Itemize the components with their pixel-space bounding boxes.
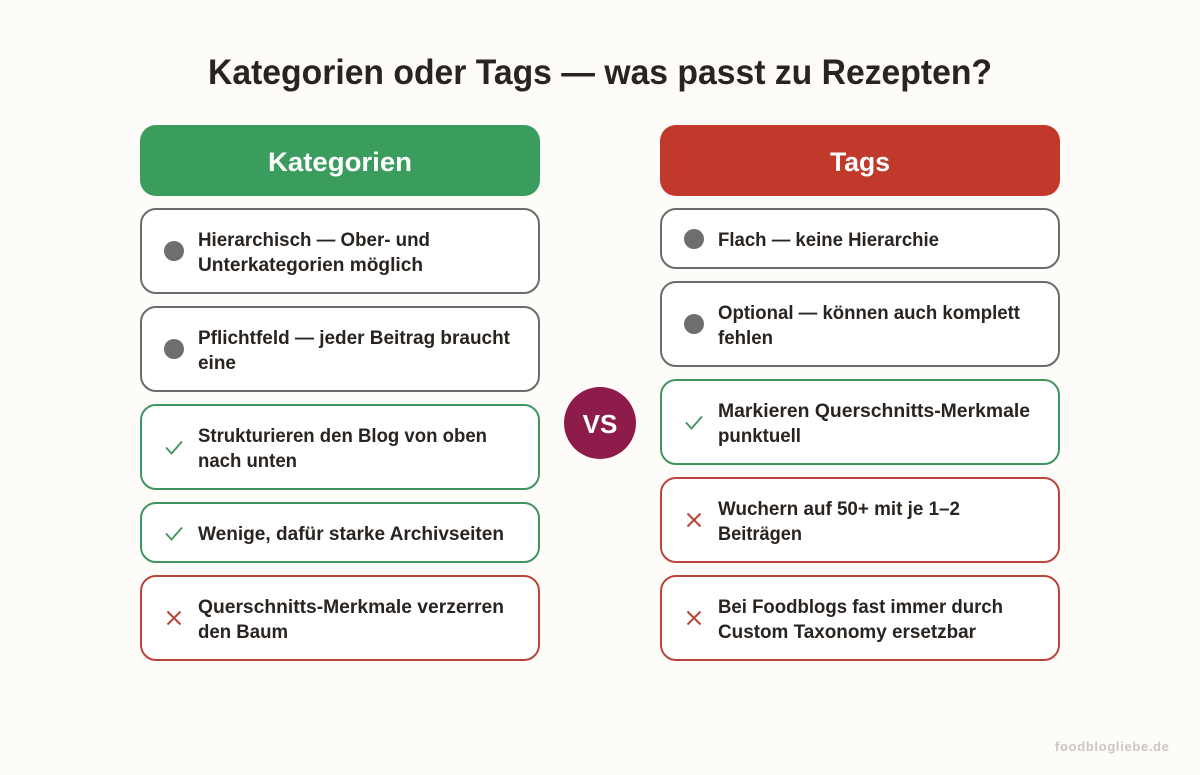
heading: Kategorien <box>140 125 540 196</box>
item: Wuchern: Wuchern auf 50+ mit je 1–2 <box>718 498 960 520</box>
item: Flach <box>661 209 1059 268</box>
item: Optional: Optional — können auch komplett <box>718 302 1020 324</box>
item: Wenige <box>141 503 539 562</box>
item: Markieren <box>661 380 1059 464</box>
item: Querschnitts-Merkmale <box>141 576 539 660</box>
item: Pflichtfeld: eine <box>198 352 236 374</box>
item: Querschnitts-Merkmale: Querschnitts-Merkmale verzerren <box>198 596 504 618</box>
item: Hierarchisch: Unterkategorien möglich <box>198 254 423 276</box>
item: Wenige: Wenige, dafür starke Archivseiten <box>198 523 504 545</box>
panel: Tags column <box>660 125 1060 660</box>
item: Strukturieren: Strukturieren den Blog von oben <box>198 425 487 447</box>
item: Flach: Flach — keine Hierarchie <box>718 229 939 251</box>
heading: Kategorien: Kategorien <box>268 147 412 177</box>
item: Wuchern: Beiträgen <box>718 523 802 545</box>
item: Markieren: Markieren Querschnitts-Merkmale <box>718 400 1030 422</box>
item: Hierarchisch: Hierarchisch — Ober- und <box>198 229 430 251</box>
item: Markieren: punktuell <box>718 425 801 447</box>
heading: Tags: Tags <box>830 147 890 177</box>
item: Querschnitts-Merkmale: den Baum <box>198 621 288 643</box>
footer: source: foodblogliebe.de <box>1055 739 1169 754</box>
item: Bei Foodblogs: Custom Taxonomy ersetzbar <box>718 621 976 643</box>
badge: VS: VS <box>583 409 617 439</box>
badge: VS <box>564 387 636 459</box>
item: Strukturieren <box>141 405 539 489</box>
title: Kategorien oder Tags — was passt zu Rezepten? <box>208 53 992 92</box>
item: Pflichtfeld <box>141 307 539 391</box>
item: Bei Foodblogs <box>661 576 1059 660</box>
heading: Tags <box>660 125 1060 196</box>
item: Optional: fehlen <box>718 327 773 349</box>
item: Optional <box>661 282 1059 366</box>
panel: Kategorien column <box>140 125 540 660</box>
item: Strukturieren: nach unten <box>198 450 297 472</box>
item: Wuchern <box>661 478 1059 562</box>
item: Pflichtfeld: Pflichtfeld — jeder Beitrag braucht <box>198 327 510 349</box>
item: Hierarchisch <box>141 209 539 293</box>
item: Bei Foodblogs: Bei Foodblogs fast immer durch <box>718 596 1003 618</box>
